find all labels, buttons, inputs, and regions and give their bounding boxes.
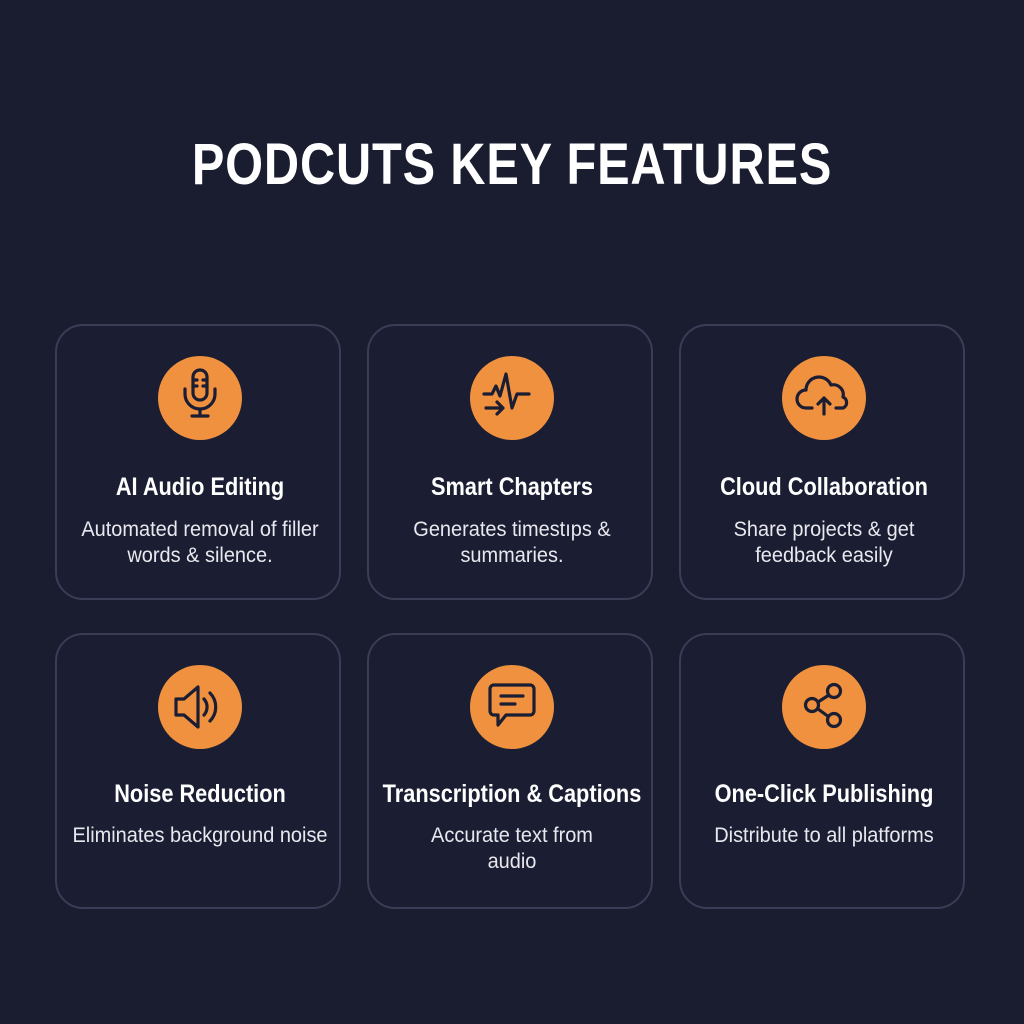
description: Share projects & get xyxy=(734,518,914,541)
icon: waveform arrow xyxy=(470,356,554,440)
card: Transcription & Captions xyxy=(367,633,653,909)
icon: cloud upload xyxy=(782,356,866,440)
icon: speaker xyxy=(158,665,242,749)
description: Distribute to all platforms xyxy=(714,824,934,847)
heading: Cloud Collaboration xyxy=(720,473,928,501)
card: Noise Reduction xyxy=(55,633,341,909)
heading: Transcription & Captions xyxy=(383,780,641,808)
heading: Smart Chapters xyxy=(431,473,593,501)
description xyxy=(431,824,593,873)
description: Generates timestıps & xyxy=(413,518,611,541)
description: Automated removal of filler xyxy=(81,518,319,541)
description: feedback easily xyxy=(755,544,893,567)
card: AI Audio Editing xyxy=(55,324,341,600)
description xyxy=(81,518,319,567)
description xyxy=(734,518,914,567)
heading: Noise Reduction xyxy=(114,780,286,808)
description: audio xyxy=(488,850,536,873)
card: Cloud Collaboration xyxy=(679,324,965,600)
description: Accurate text from xyxy=(431,824,593,847)
description: words & silence. xyxy=(127,544,273,567)
description: Eliminates background noise xyxy=(72,824,328,847)
icon: microphone xyxy=(158,356,242,440)
icon: share xyxy=(782,665,866,749)
card: One-Click Publishing xyxy=(679,633,965,909)
title: PODCUTS KEY FEATURES xyxy=(192,132,832,197)
heading: AI Audio Editing xyxy=(116,473,284,501)
description xyxy=(413,518,611,567)
icon: chat bubble xyxy=(470,665,554,749)
heading: One-Click Publishing xyxy=(715,780,933,808)
description: summaries. xyxy=(460,544,564,567)
card: Smart Chapters xyxy=(367,324,653,600)
